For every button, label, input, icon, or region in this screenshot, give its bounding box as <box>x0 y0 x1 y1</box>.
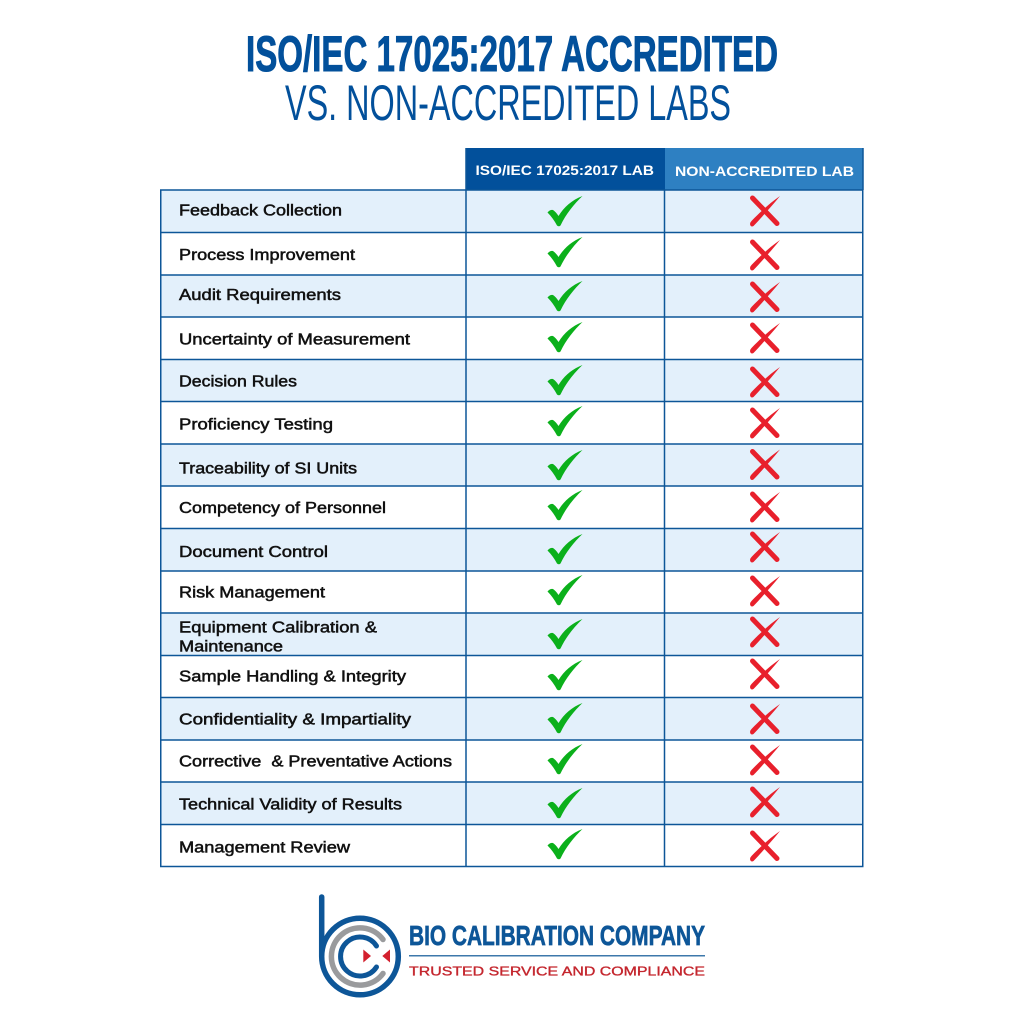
label: Corrective & Preventative Actions <box>179 754 452 770</box>
label: Document Control <box>179 544 328 561</box>
label: Feedback Collection <box>179 202 342 220</box>
logo divider <box>409 955 705 956</box>
comparison table <box>161 148 863 866</box>
label: Decision Rules <box>179 374 297 390</box>
label: Proficiency Testing <box>179 416 333 434</box>
header: ISO/IEC 17025:2017 lab <box>466 148 665 190</box>
label: Traceability of SI Units <box>179 460 357 478</box>
label: Uncertainty of Measurement <box>179 332 411 348</box>
title line 2: VS. NON-ACCREDITED LABS <box>285 75 731 131</box>
label: Equipment Calibration & <box>179 620 378 636</box>
label: Process Improvement <box>179 247 356 264</box>
cross marks column <box>750 196 780 861</box>
label: Sample Handling & Integrity <box>179 668 406 686</box>
label: Risk Management <box>179 584 326 602</box>
header: non-accredited lab: NON-ACCREDITED LAB <box>675 163 854 179</box>
label: Confidentiality & Impartiality <box>179 712 411 728</box>
label: Audit Requirements <box>179 287 341 304</box>
icon: bc logo mark <box>322 897 398 995</box>
header: ISO/IEC 17025:2017 lab: ISO/IEC 17025:2017 LAB <box>476 162 654 178</box>
company name: BIO CALIBRATION COMPANY <box>409 920 705 951</box>
label: Management Review <box>179 840 351 856</box>
row labels <box>179 202 452 856</box>
title <box>246 26 778 131</box>
label: Competency of Personnel <box>179 500 386 517</box>
label continuation: Maintenance <box>179 638 283 656</box>
row backgrounds <box>161 190 863 824</box>
header: non-accredited lab <box>665 148 863 190</box>
company logo <box>322 897 705 995</box>
check marks column <box>548 196 582 859</box>
tagline: TRUSTED SERVICE AND COMPLIANCE <box>409 964 705 978</box>
label: Technical Validity of Results <box>179 796 402 814</box>
